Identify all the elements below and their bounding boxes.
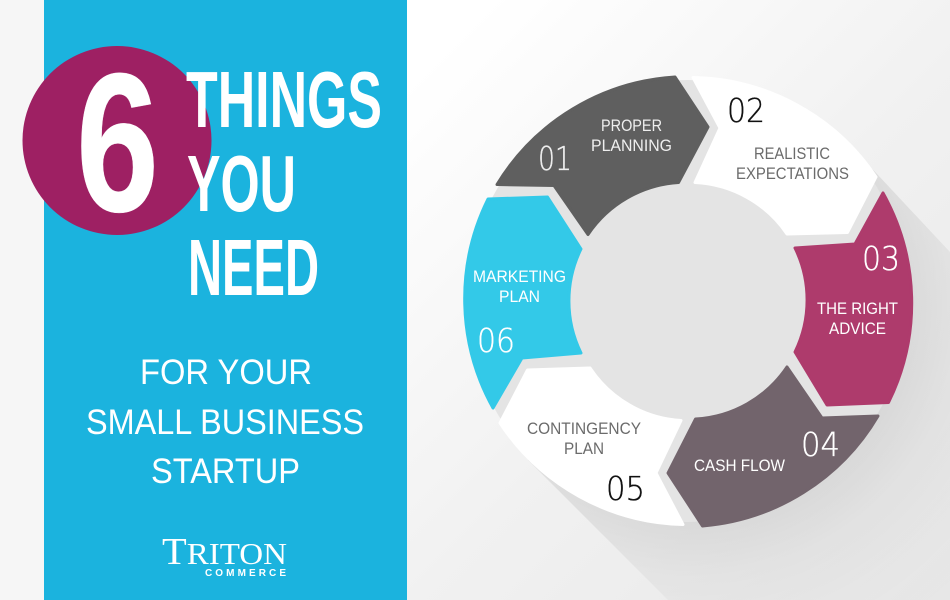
segment 01: proper planning: PLANNING xyxy=(591,137,672,155)
segment 02: realistic expectations xyxy=(693,78,876,234)
title: things you need: THINGS xyxy=(186,55,382,144)
long drop shadow of the ring xyxy=(528,142,950,600)
segment 03: the right advice: 03 xyxy=(862,239,900,278)
segment 06: marketing plan: 06 xyxy=(477,321,515,360)
title: things you need xyxy=(186,55,382,312)
subtitle: for your small business startup: SMALL BUSINESS xyxy=(86,403,364,442)
segment 05: contingency plan: CONTINGENCY xyxy=(527,420,641,438)
segment 01: proper planning xyxy=(497,77,708,234)
subtitle: for your small business startup: FOR YOUR xyxy=(140,353,312,392)
segment 06: marketing plan: PLAN xyxy=(499,288,540,306)
segment 02: realistic expectations: 02 xyxy=(727,91,765,130)
segment 05: contingency plan: 05 xyxy=(606,469,645,508)
title: things you need: YOU xyxy=(187,139,296,228)
segment 05: contingency plan: PLAN xyxy=(564,440,604,458)
badge: purple circle with number 6: 6 xyxy=(76,32,159,253)
segment 02: realistic expectations: REALISTIC xyxy=(754,145,830,163)
badge: purple circle with number 6 xyxy=(22,32,212,253)
segment 06: marketing plan: MARKETING xyxy=(473,268,566,286)
segment 01: proper planning: PROPER xyxy=(601,117,662,135)
segment 04: cash flow: CASH FLOW xyxy=(694,457,785,475)
subtitle: for your small business startup xyxy=(86,353,364,491)
segment 05: contingency plan xyxy=(500,368,683,524)
segment 04: cash flow xyxy=(668,367,878,526)
segment 02: realistic expectations: EXPECTATIONS xyxy=(736,165,849,183)
segment 04: cash flow: 04 xyxy=(801,425,840,464)
segment 06: marketing plan xyxy=(465,197,581,408)
grey disc behind the segments xyxy=(466,80,908,522)
title: things you need: NEED xyxy=(188,223,319,312)
segment 01: proper planning: 01 xyxy=(538,139,572,178)
segment 03: the right advice: THE RIGHT xyxy=(817,300,898,318)
cycle diagram xyxy=(465,77,912,526)
segment 03: the right advice xyxy=(795,193,912,405)
logo: triton commerce: TRITON xyxy=(162,531,287,573)
subtitle: for your small business startup: STARTUP xyxy=(151,452,300,491)
segment 03: the right advice: ADVICE xyxy=(829,320,886,338)
logo: triton commerce: COMMERCE xyxy=(205,568,286,579)
panel: blue title panel xyxy=(44,0,407,600)
